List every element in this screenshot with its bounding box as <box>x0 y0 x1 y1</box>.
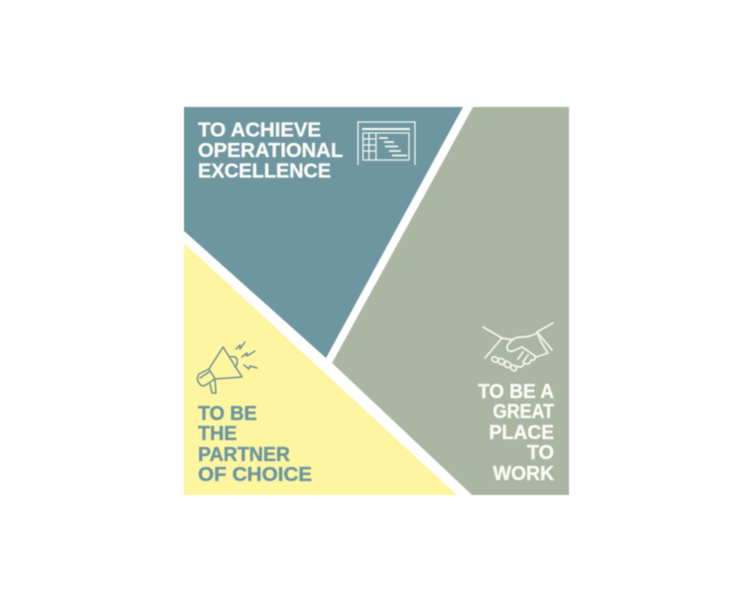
heading: to be a great place to work: PLACE <box>489 422 554 444</box>
heading: to achieve operational excellence: OPERATIONAL <box>198 140 343 162</box>
heading: to be the partner of choice <box>198 403 312 486</box>
icon: handshake <box>483 323 553 372</box>
heading: to achieve operational excellence <box>198 120 343 182</box>
icon: megaphone <box>197 342 257 393</box>
panel: great place to work <box>332 107 569 495</box>
heading: to be the partner of choice: OF CHOICE <box>198 464 312 486</box>
icon: gantt chart <box>358 122 415 165</box>
heading: to be a great place to work: WORK <box>493 463 555 485</box>
heading: to be the partner of choice: THE <box>198 423 237 445</box>
heading: to be a great place to work <box>478 381 555 485</box>
heading: to be the partner of choice: PARTNER <box>198 444 291 466</box>
panel: operational excellence <box>184 107 463 358</box>
heading: to be the partner of choice: TO BE <box>198 403 257 425</box>
heading: to achieve operational excellence: TO ACHIEVE <box>198 120 321 142</box>
panel: partner of choice <box>184 243 457 495</box>
heading: to be a great place to work: TO <box>527 442 554 464</box>
heading: to be a great place to work: TO BE A <box>478 381 554 403</box>
heading: to achieve operational excellence: EXCELLENCE <box>198 160 331 182</box>
heading: to be a great place to work: GREAT <box>493 401 554 423</box>
